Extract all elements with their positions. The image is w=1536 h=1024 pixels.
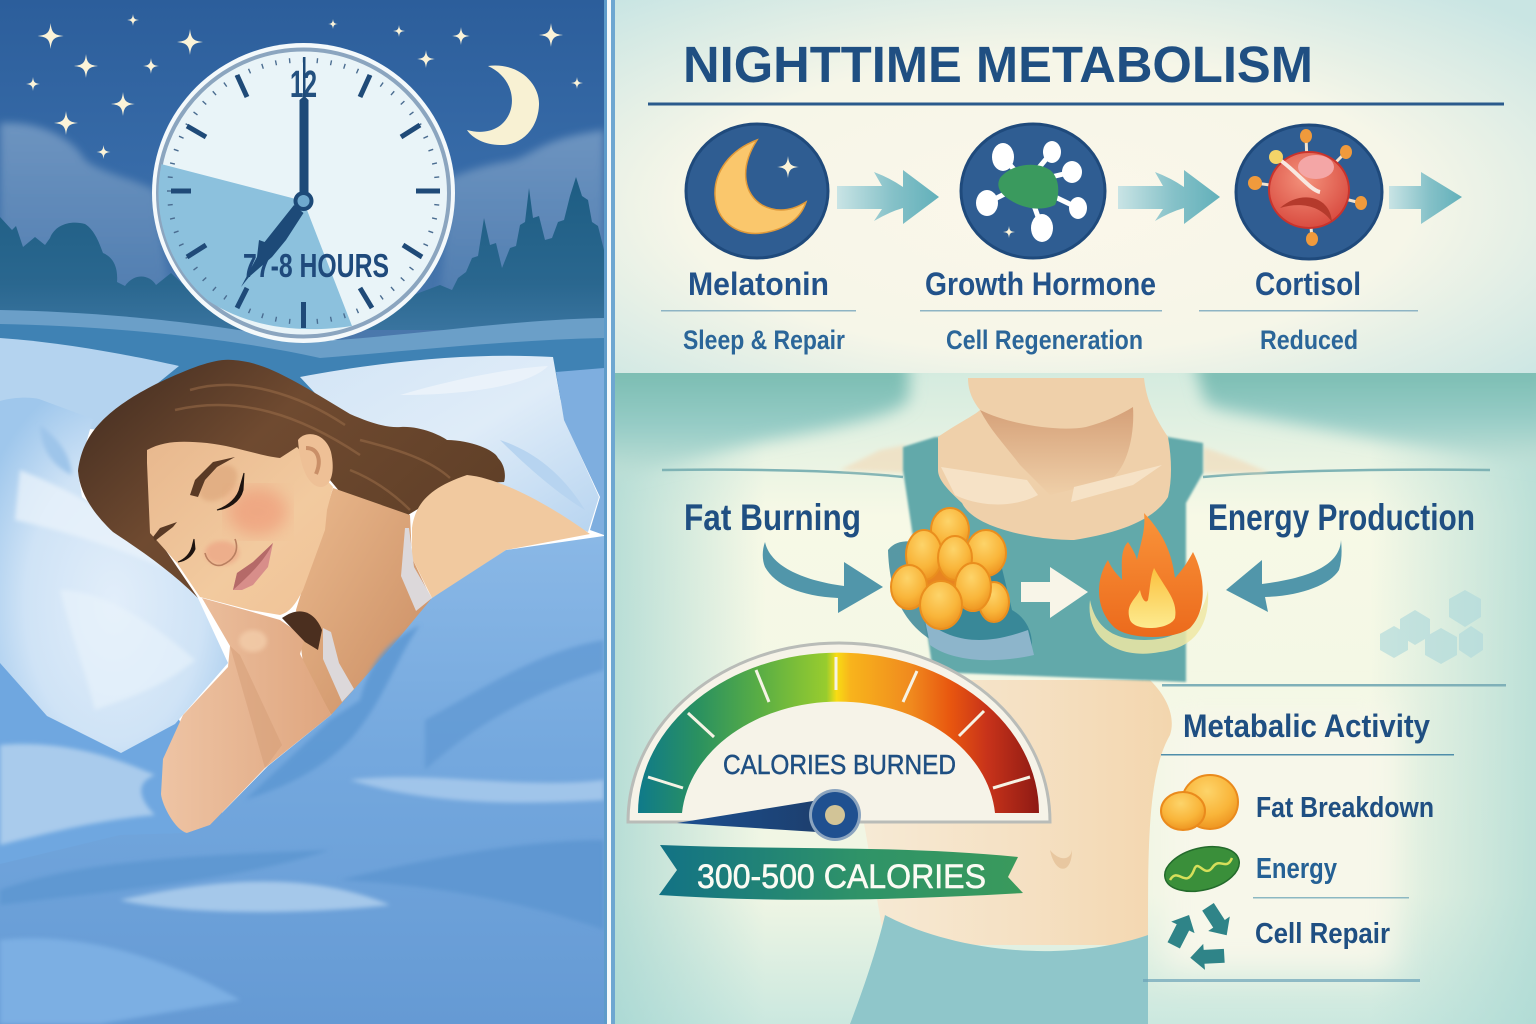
hair xyxy=(78,360,505,598)
shoulder xyxy=(412,475,590,598)
sheet highlights xyxy=(0,744,155,845)
icon: cortisol xyxy=(1236,125,1382,259)
label: cell repair: Cell Repair xyxy=(1255,918,1390,950)
title: NIGHTTIME METABOLISM xyxy=(683,36,1313,93)
hand shading xyxy=(230,646,282,768)
clouds xyxy=(0,123,604,300)
pillow folds xyxy=(15,425,195,710)
blue patch xyxy=(925,620,1034,660)
side washes xyxy=(615,373,1536,1024)
label: energy production: Energy Production xyxy=(1208,497,1475,538)
lower torso xyxy=(860,680,1172,945)
clock xyxy=(152,43,455,343)
gauge plate xyxy=(628,643,1050,822)
cream glow behind activity list xyxy=(1165,710,1395,970)
lips xyxy=(233,543,273,590)
navel xyxy=(1050,850,1072,869)
icon: molecule hexagons xyxy=(1380,590,1483,664)
label: cortisol: Cortisol xyxy=(1255,266,1361,302)
label: fat breakdown: Fat Breakdown xyxy=(1256,792,1434,824)
arrow xyxy=(1389,172,1462,224)
shoulder lines xyxy=(662,470,1490,477)
heading: Metabalic Activity xyxy=(1183,708,1430,744)
panel: sleep scene xyxy=(0,0,604,1024)
night sky xyxy=(0,0,604,340)
label: growth hormone: Growth Hormone xyxy=(925,266,1156,302)
yellow glow xyxy=(1090,590,1208,654)
icon: flame xyxy=(1099,513,1203,637)
gauge needle xyxy=(677,801,817,832)
panel: hormones header xyxy=(615,0,1536,373)
main pillow xyxy=(0,398,228,753)
closed eyes xyxy=(178,473,244,562)
icon: fat droplets xyxy=(1161,775,1238,830)
sublabel: sleep and repair: Sleep & Repair xyxy=(683,325,845,355)
bottom rule xyxy=(1143,979,1420,982)
collarbones xyxy=(941,465,1162,504)
arm xyxy=(161,598,331,833)
arrow: into flame xyxy=(1226,540,1342,612)
icon: crescent moon xyxy=(467,66,539,145)
minor ticks xyxy=(170,60,438,322)
arrow: into fat xyxy=(763,542,883,613)
arrow xyxy=(837,170,939,224)
teal patch behind fat xyxy=(888,541,1032,655)
blanket folds xyxy=(0,625,604,1024)
top straps xyxy=(323,528,432,702)
panel: metabolic activity xyxy=(1143,684,1506,982)
eye shadow xyxy=(200,464,238,502)
rule xyxy=(1253,897,1409,898)
distant hills and bed edge xyxy=(0,310,604,400)
arrow xyxy=(1118,170,1220,224)
icon: recycle xyxy=(1160,903,1230,977)
gauge label: CALORIES BURNED xyxy=(723,749,956,780)
white arrow xyxy=(1021,567,1088,618)
hair highlights xyxy=(175,385,450,510)
blanket xyxy=(0,536,604,1024)
header background xyxy=(615,0,1536,373)
neck shadow xyxy=(980,407,1133,495)
section top line xyxy=(1162,684,1506,686)
back pillows xyxy=(0,338,604,535)
hand knuckle xyxy=(239,630,267,652)
heading rule xyxy=(1161,754,1454,756)
nose xyxy=(205,539,239,565)
gauge color band xyxy=(638,653,1039,813)
forest silhouette xyxy=(0,177,604,330)
icon: growth hormone xyxy=(961,124,1105,258)
hour hand xyxy=(241,205,304,287)
gauge hub xyxy=(809,789,861,841)
eyebrows xyxy=(153,457,235,541)
fat cluster xyxy=(891,508,1009,629)
cheek blush xyxy=(228,488,288,536)
woman sleeping xyxy=(78,360,590,833)
collarbone skin patches xyxy=(840,445,1270,473)
divider stripe xyxy=(604,0,615,1024)
shorts xyxy=(850,915,1148,1024)
stars xyxy=(26,14,583,159)
duration label: 77-8 HOURS xyxy=(243,247,389,284)
face xyxy=(147,442,333,615)
shoulder background shapes xyxy=(600,360,1536,480)
hair under chin xyxy=(282,611,322,650)
label: melatonin: Melatonin xyxy=(688,266,829,302)
neck and chin xyxy=(938,378,1171,540)
label: fat burning: Fat Burning xyxy=(684,497,861,538)
icon: mitochondrion xyxy=(1160,839,1244,899)
gauge ticks xyxy=(648,657,1030,788)
calories value: 300-500 CALORIES xyxy=(697,858,986,896)
numeral 12: 12 xyxy=(290,64,317,106)
label dividers xyxy=(661,310,1418,312)
label: energy: Energy xyxy=(1256,853,1337,885)
clock rim xyxy=(152,43,455,343)
clock hub xyxy=(294,191,314,211)
calories banner xyxy=(659,845,1023,900)
title underline xyxy=(648,102,1504,106)
sublabel: reduced: Reduced xyxy=(1260,325,1358,355)
hour ticks xyxy=(171,75,440,328)
bed sheet xyxy=(0,663,222,864)
clock face xyxy=(158,50,449,336)
sleep duration sector xyxy=(156,164,352,329)
tank top xyxy=(903,437,1203,682)
panel: body metabolism xyxy=(600,360,1536,1024)
sublabel: cell regeneration: Cell Regeneration xyxy=(946,325,1143,355)
ear xyxy=(298,434,333,487)
icon: melatonin xyxy=(686,124,828,258)
gauge: calories burned xyxy=(628,643,1050,900)
neck and chest xyxy=(296,488,432,715)
minute hand xyxy=(300,57,308,195)
lower background xyxy=(615,373,1536,1024)
